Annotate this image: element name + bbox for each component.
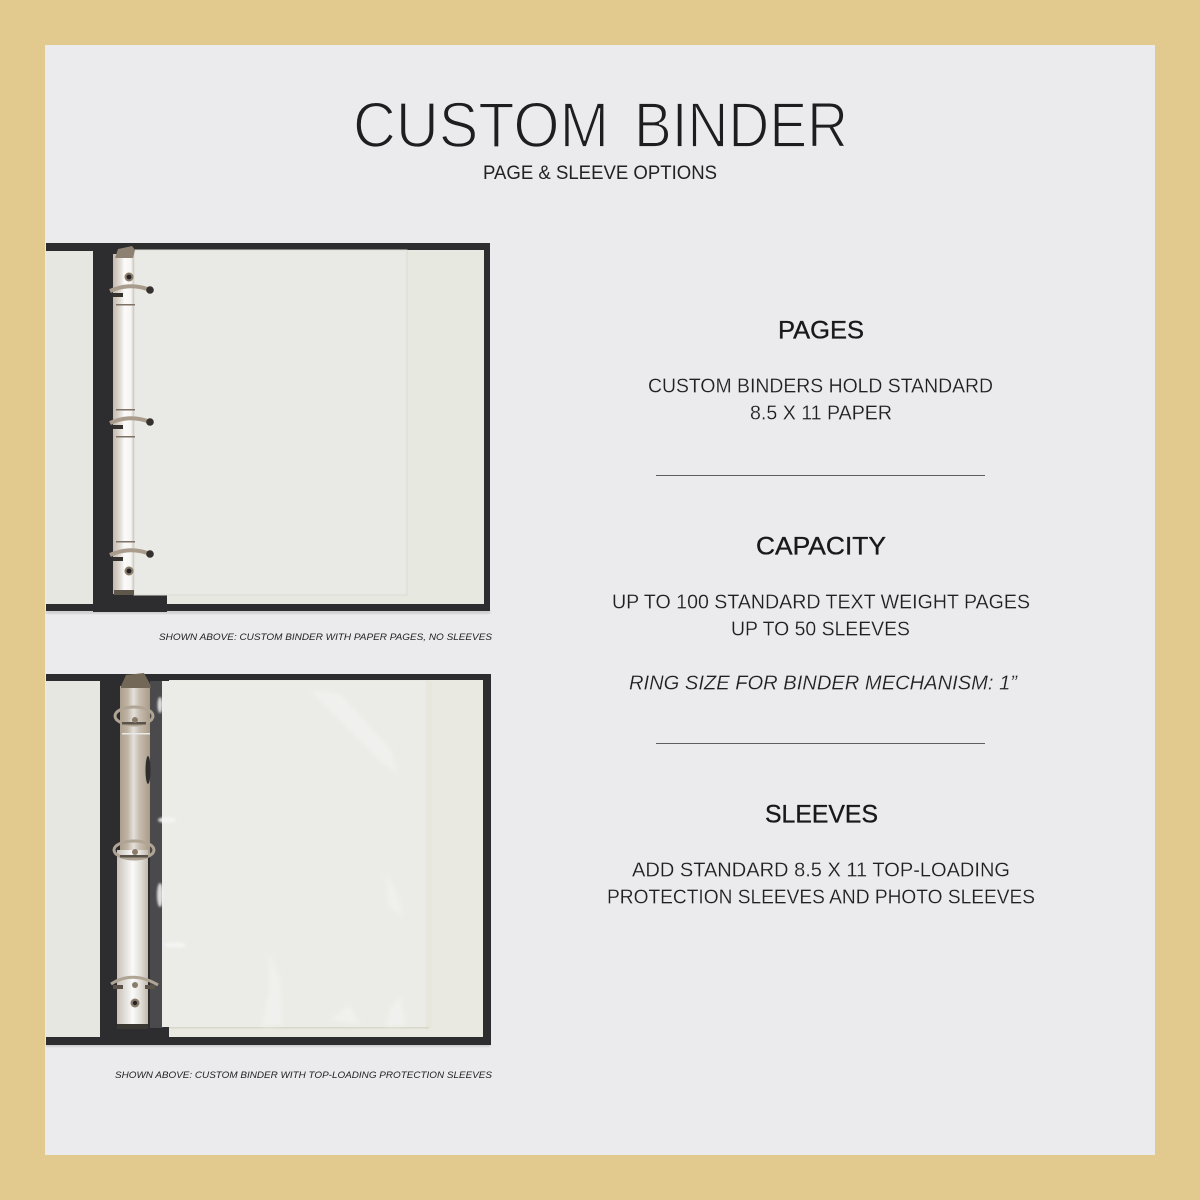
left inside cover [46, 251, 93, 604]
text: capacity description [612, 590, 1030, 694]
bottom edge of sleeve [169, 1027, 429, 1028]
ring mechanism [110, 246, 154, 595]
ring top [110, 286, 150, 555]
binder cover [46, 674, 491, 1045]
sleeve page [162, 681, 428, 1027]
photo: binder with sleeves [46, 673, 491, 1047]
spine strip under sleeve [150, 681, 163, 1028]
text: sleeves description: PROTECTION SLEEVES AND PHOTO SLEEVES [607, 886, 1035, 908]
photo: binder with paper pages [46, 243, 490, 614]
binder shadow [46, 1043, 490, 1047]
text: pages description: CUSTOM BINDERS HOLD STANDARD [648, 374, 993, 398]
text: pages description: 8.5 X 11 PAPER [750, 402, 892, 424]
heading: capacity: CAPACITY [756, 532, 886, 560]
spine band under paper [93, 250, 167, 612]
heading: sleeves: SLEEVES [765, 800, 878, 828]
sleeve highlights [262, 690, 406, 1027]
text: sleeves description: ADD STANDARD 8.5 X 11 TOP-LOADING [632, 858, 1010, 882]
text: capacity description: RING SIZE FOR BINDER MECHANISM: 1” [629, 672, 1018, 694]
page behind sleeve [426, 681, 432, 1028]
subtitle: PAGE & SLEEVE OPTIONS [483, 163, 717, 184]
rings [111, 707, 158, 985]
text: sleeves description [607, 858, 1035, 908]
right inside cover [134, 250, 484, 604]
text: capacity description: UP TO 100 STANDARD TEXT WEIGHT PAGES [612, 590, 1030, 614]
text: capacity description: UP TO 50 SLEEVES [731, 618, 910, 640]
title: CUSTOM [353, 89, 609, 161]
binder shadow [46, 610, 490, 614]
ring mechanism [111, 673, 158, 1029]
left inside cover [46, 681, 100, 1037]
title [353, 89, 848, 161]
sleeve edge glints [157, 697, 186, 948]
caption: binder with paper pages: SHOWN ABOVE: CUSTOM BINDER WITH PAPER PAGES, NO SLEEVES [159, 632, 493, 643]
title: BINDER [634, 89, 848, 161]
caption: binder with sleeves: SHOWN ABOVE: CUSTOM BINDER WITH TOP-LOADING PROTECTION SLEEVES [115, 1070, 493, 1081]
text: pages description [648, 374, 993, 424]
divider [656, 475, 985, 476]
binder cover [46, 243, 490, 611]
paper stack [134, 250, 407, 595]
divider [656, 743, 985, 744]
heading: pages: PAGES [778, 316, 864, 344]
right inside cover [169, 680, 483, 1037]
